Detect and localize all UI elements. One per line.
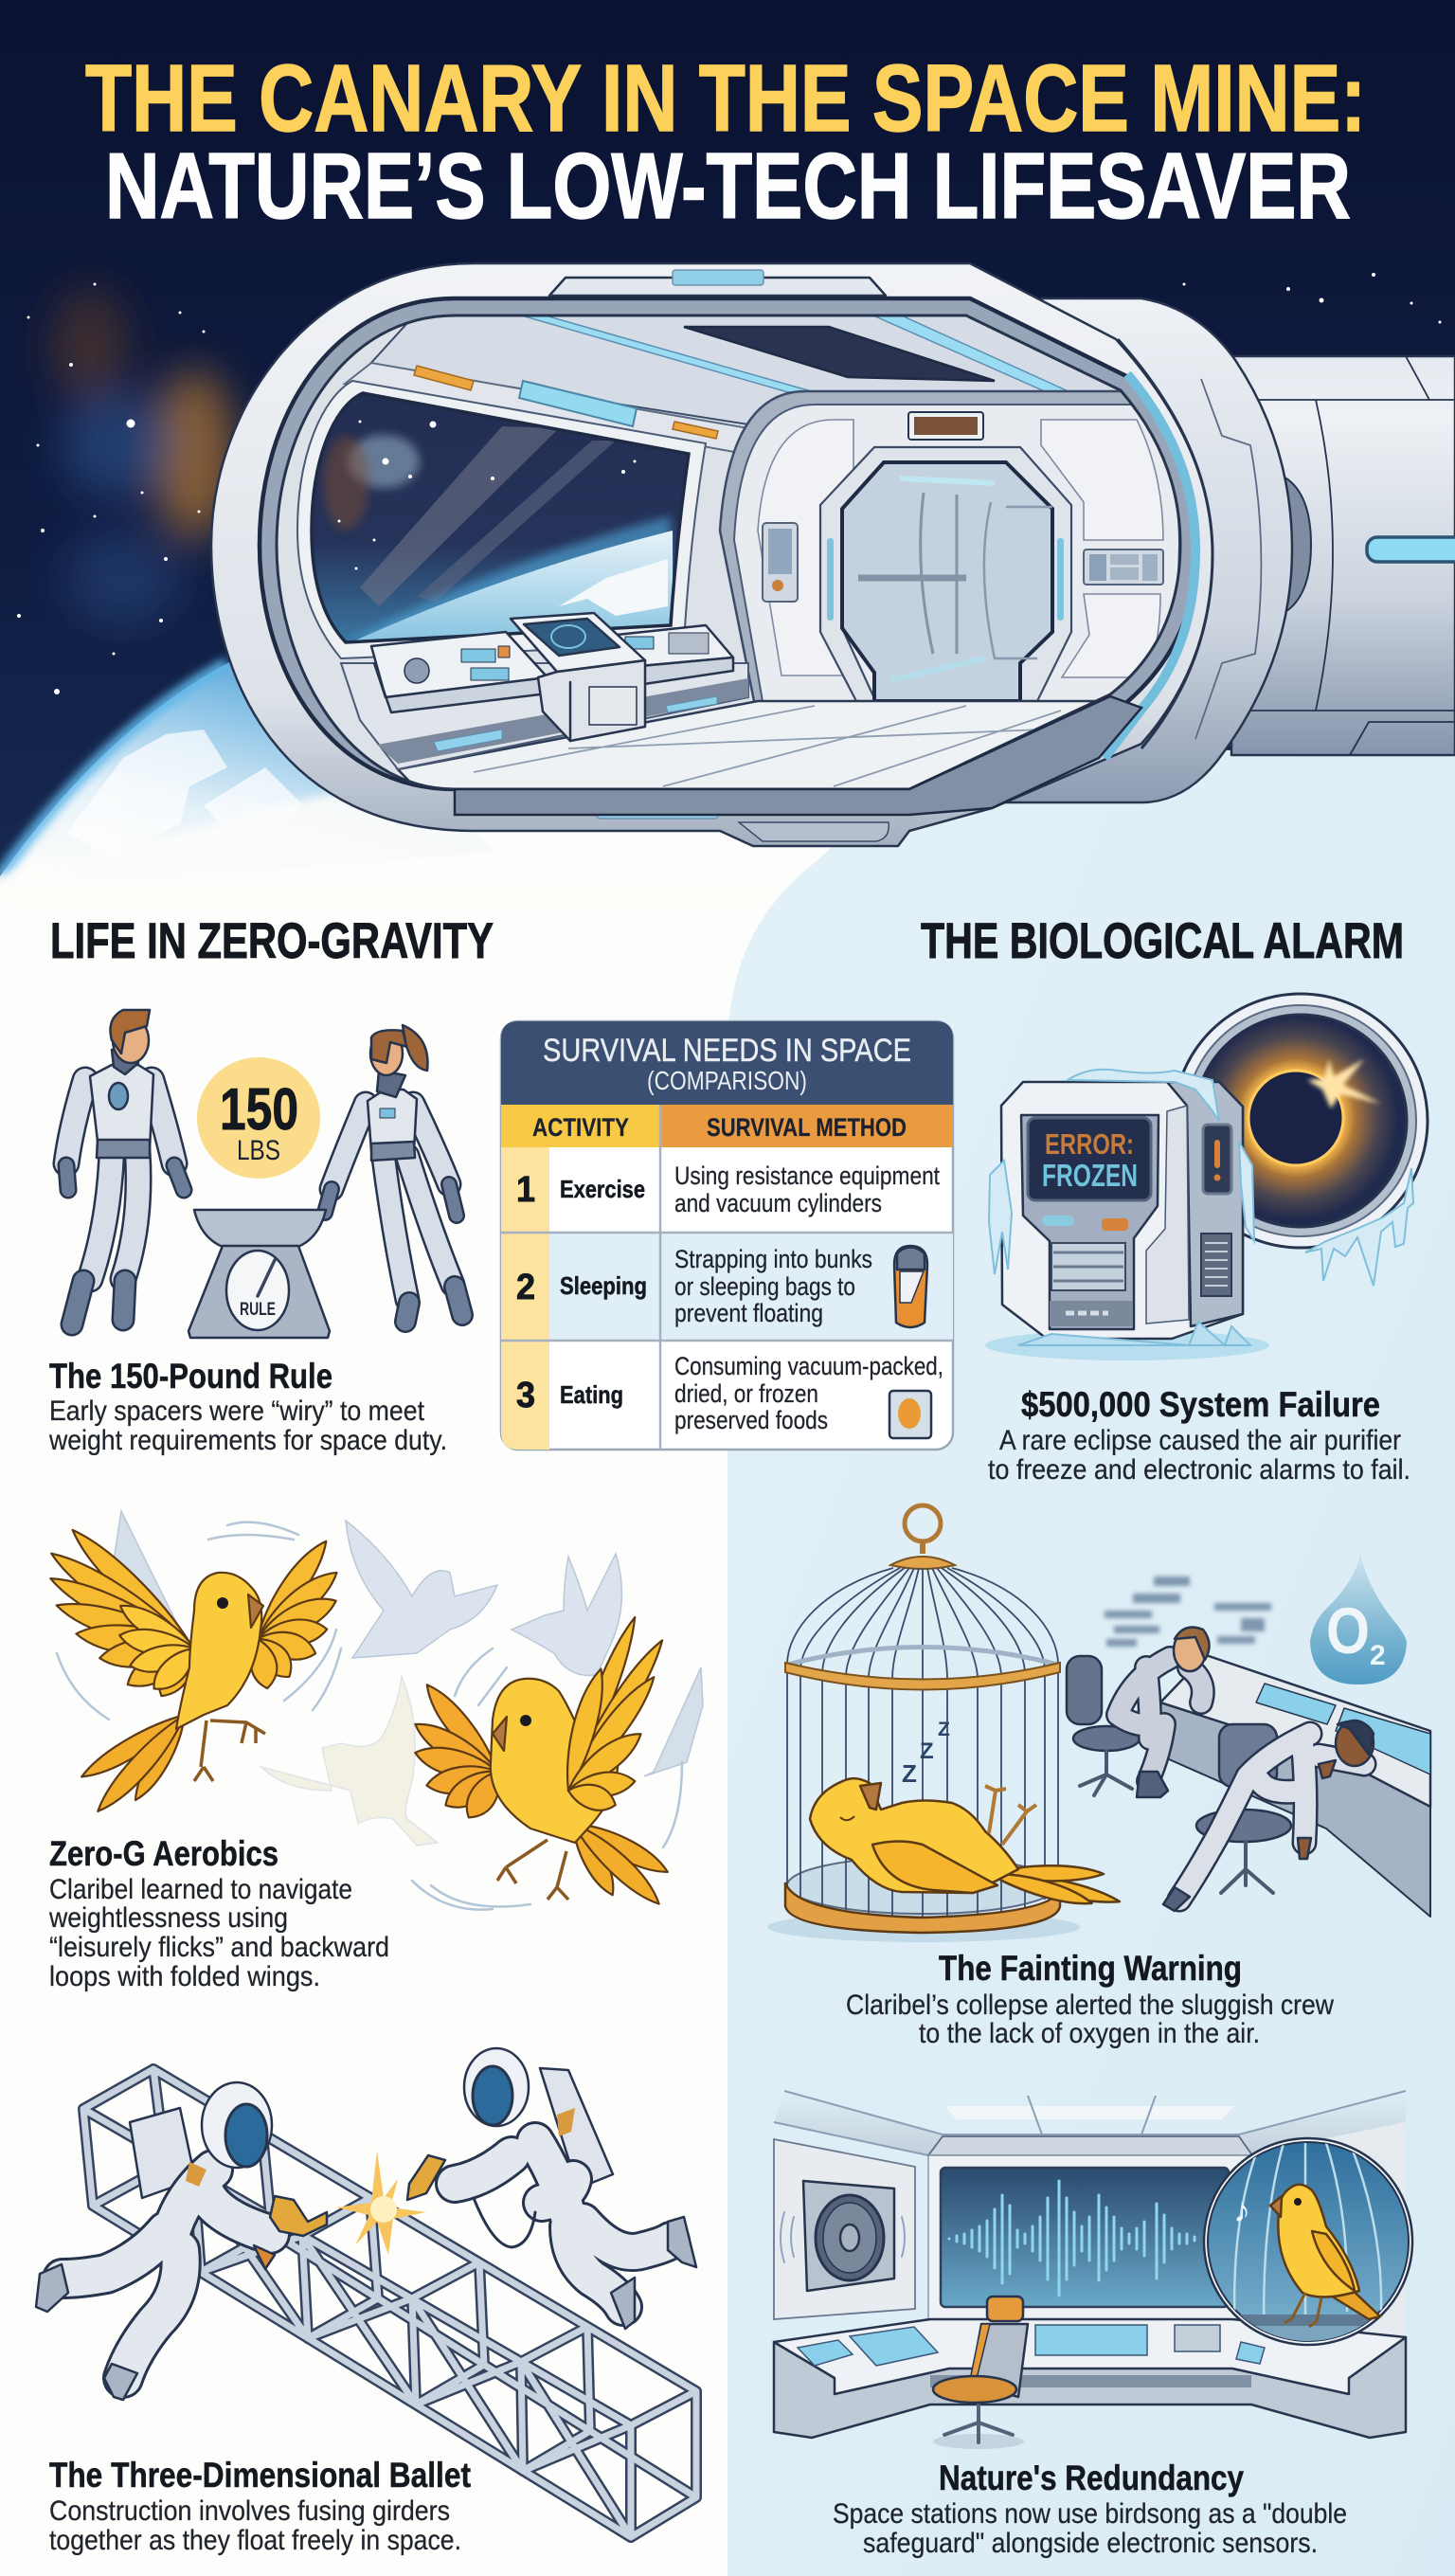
nebula glow xyxy=(52,289,234,625)
table body xyxy=(501,1021,953,1450)
heading: $500,000 System Failure xyxy=(1021,1385,1380,1424)
text block: the 150-pound rule xyxy=(48,1357,447,1456)
right bevel xyxy=(1146,1106,1189,1324)
beak xyxy=(860,1783,881,1810)
body xyxy=(810,1778,1018,1893)
collar ring xyxy=(947,298,1292,802)
cage floor disc xyxy=(787,1857,1058,1914)
astronaut 1 xyxy=(36,2082,327,2400)
console screens xyxy=(798,2325,1265,2366)
body: Space stations now use birdsong as a "double xyxy=(833,2498,1347,2530)
cage ring xyxy=(890,1505,955,1569)
title xyxy=(85,45,1366,238)
floor lines xyxy=(474,706,1061,786)
boot and head xyxy=(1137,1628,1210,1797)
space module illustration xyxy=(211,263,1455,846)
heading: Nature's Redundancy xyxy=(939,2459,1244,2497)
left door panel xyxy=(763,523,834,621)
console base shadow band xyxy=(930,2375,1251,2387)
ceiling skylight xyxy=(684,327,995,381)
column headers xyxy=(501,1105,953,1147)
cage base xyxy=(785,1882,1060,1933)
wall panel with lights xyxy=(345,363,748,453)
console top xyxy=(774,2319,1406,2394)
zzz xyxy=(902,1719,950,1788)
torso and head xyxy=(368,1025,427,1161)
collar bump xyxy=(1284,477,1311,613)
legs xyxy=(497,1840,568,1900)
male astronaut xyxy=(66,1010,184,1324)
cage bars back and dome xyxy=(787,1568,1058,1923)
crew member 2 xyxy=(1163,1720,1374,1911)
female astronaut xyxy=(325,1025,462,1322)
row 2: prevent floating xyxy=(674,1299,823,1327)
welding tool xyxy=(254,2196,327,2269)
cage bars in porthole xyxy=(1203,2143,1421,2350)
main shell xyxy=(211,263,1212,846)
back wall frame xyxy=(718,390,1129,701)
left wing xyxy=(45,1522,204,1703)
back wall panels xyxy=(758,420,1163,677)
lower hero fade to page xyxy=(0,791,834,900)
main screen xyxy=(941,2168,1229,2307)
interior outline xyxy=(277,315,1180,789)
suit limbs xyxy=(63,2170,270,2378)
connecting tube xyxy=(1231,356,1455,755)
ring edge line xyxy=(1118,339,1212,748)
boots and gloves xyxy=(66,1165,184,1324)
blue ring strip xyxy=(1105,374,1195,758)
text block: $500,000 system failure xyxy=(988,1385,1410,1486)
row 1: and vacuum cylinders xyxy=(674,1189,882,1217)
moon xyxy=(1248,1071,1343,1165)
boots and gloves xyxy=(325,1184,462,1322)
interior xyxy=(270,308,1203,791)
top hatch light xyxy=(549,270,886,296)
comparison table xyxy=(501,1021,953,1450)
tail feathers xyxy=(77,1707,193,1819)
zzz: Z xyxy=(938,1719,950,1740)
canary porthole xyxy=(1203,2138,1421,2350)
door opening xyxy=(842,462,1052,701)
console base xyxy=(774,2337,1406,2438)
back wall xyxy=(928,2155,1250,2321)
ceiling xyxy=(774,2091,1406,2155)
left wall xyxy=(278,326,753,779)
zzz: Z xyxy=(902,1759,917,1788)
hero: space backdrop xyxy=(0,0,1455,900)
illustration: fainted canary in cage xyxy=(767,1505,1430,1942)
column headers: SURVIVAL METHOD xyxy=(707,1113,907,1142)
cage mid ring xyxy=(785,1647,1060,1690)
floor lip xyxy=(455,696,1141,815)
table header xyxy=(501,1021,953,1105)
illustration: truss and astronauts xyxy=(36,2048,696,2537)
beak xyxy=(493,1717,507,1751)
150 lbs badge xyxy=(197,1057,320,1179)
front panel xyxy=(1021,1115,1159,1329)
text block: the fainting warning: to the lack of oxygen in the air. xyxy=(919,2018,1260,2049)
row 2: 2 xyxy=(516,1268,535,1307)
row 2 xyxy=(516,1245,872,1327)
console desk xyxy=(1160,1655,1430,1917)
text block: nature's redundancy: safeguard" alongside electronic sensors. xyxy=(863,2528,1318,2559)
row 3: dried, or frozen xyxy=(674,1379,818,1408)
backpack xyxy=(540,2068,613,2189)
heading: The Three-Dimensional Ballet xyxy=(49,2456,471,2495)
illustration: control room with canary xyxy=(774,2091,1421,2449)
side vent xyxy=(1201,1234,1231,1296)
body xyxy=(176,1573,261,1729)
right wing xyxy=(557,1613,671,1815)
body: Construction involves fusing girders xyxy=(49,2495,450,2527)
body: Claribel learned to navigate xyxy=(49,1874,352,1905)
scale xyxy=(189,1210,330,1338)
text block: three-dimensional ballet: together as they float freely in space. xyxy=(49,2525,461,2556)
table header: (COMPARISON) xyxy=(647,1066,807,1095)
row 1: Using resistance equipment xyxy=(674,1162,940,1190)
right wall xyxy=(1250,2122,1406,2340)
text block: zero-g aerobics: loops with folded wings. xyxy=(49,1961,320,1992)
body xyxy=(491,1679,618,1843)
oxygen drop xyxy=(1310,1554,1407,1684)
row 3: Eating xyxy=(560,1380,623,1409)
stars xyxy=(17,273,1442,694)
window outline xyxy=(312,393,689,642)
icon: food packet xyxy=(889,1391,931,1438)
heading: The Fainting Warning xyxy=(939,1949,1242,1988)
window frame xyxy=(297,381,706,658)
upturned feet xyxy=(985,1786,1036,1845)
speaker xyxy=(781,2181,905,2291)
canary 2 xyxy=(409,1613,673,1911)
suit limbs xyxy=(332,1104,453,1300)
ceiling panel xyxy=(928,2136,1252,2155)
illustration: astronauts and scale xyxy=(66,1010,462,1338)
illustration: frozen air purifier xyxy=(985,1070,1269,1360)
fainted canary xyxy=(810,1778,1122,1910)
ghost doves xyxy=(112,1511,703,1776)
sign xyxy=(908,412,983,440)
chair 2 xyxy=(1196,1724,1291,1893)
body: Claribel’s collepse alerted the sluggish crew xyxy=(846,1990,1334,2021)
grey ring band xyxy=(260,298,1197,789)
screen: FROZEN xyxy=(1042,1158,1138,1193)
chair xyxy=(933,2297,1028,2449)
ceiling lines xyxy=(774,2091,1406,2155)
number column xyxy=(501,1147,549,1450)
window view xyxy=(313,394,687,640)
tail feathers xyxy=(565,1814,673,1911)
welding tool xyxy=(407,2155,535,2247)
pale dove xyxy=(261,1677,438,1846)
tube window strip xyxy=(1367,537,1455,562)
row 2: or sleeping bags to xyxy=(674,1272,855,1301)
sun flare xyxy=(1307,1059,1381,1108)
boots xyxy=(611,2217,696,2329)
left wall xyxy=(774,2139,915,2319)
tail feathers xyxy=(988,1865,1122,1910)
row 1 xyxy=(516,1162,940,1217)
atmosphere glow xyxy=(0,663,227,876)
motion lines xyxy=(57,1522,682,1910)
center terminal xyxy=(511,613,645,741)
closed eye xyxy=(840,1816,854,1820)
right panel background xyxy=(728,748,1455,2576)
text block: three-dimensional ballet xyxy=(49,2456,471,2556)
wing xyxy=(872,1842,997,1893)
music note: ♪ xyxy=(1233,2190,1250,2229)
eye xyxy=(520,1715,531,1726)
150 lbs badge: LBS xyxy=(237,1135,280,1166)
uniform xyxy=(1118,1658,1203,1781)
helmet xyxy=(464,2048,529,2126)
text block: the fainting warning xyxy=(846,1949,1334,2049)
ice xyxy=(989,1070,1254,1345)
door outer frame xyxy=(820,447,1071,701)
crew member 1 xyxy=(1118,1628,1210,1797)
eye xyxy=(217,1597,228,1609)
screen: ERROR: xyxy=(1045,1127,1134,1161)
boots and fittings xyxy=(36,2264,137,2400)
astronaut 2 xyxy=(407,2048,696,2329)
machine body xyxy=(1001,1082,1243,1339)
row 1: Exercise xyxy=(560,1175,645,1203)
text block: zero-g aerobics: “leisurely flicks” and backward xyxy=(49,1932,389,1963)
patch xyxy=(186,2162,207,2187)
puddle xyxy=(985,1330,1269,1360)
row 2 tint xyxy=(549,1233,953,1341)
oxygen drop: 2 xyxy=(1370,1640,1386,1671)
text block: nature's redundancy xyxy=(833,2459,1347,2559)
row 3: preserved foods xyxy=(674,1406,828,1434)
lower left wall strip xyxy=(341,663,748,769)
left wing xyxy=(409,1679,509,1825)
floor skirt band xyxy=(377,678,748,764)
ceiling light strips xyxy=(512,313,1070,392)
suit limbs xyxy=(455,2141,671,2307)
150 lbs badge: 150 xyxy=(220,1077,298,1143)
table header: SURVIVAL NEEDS IN SPACE xyxy=(543,1033,911,1069)
wall lights low xyxy=(434,696,717,751)
chair 1 xyxy=(1067,1656,1140,1795)
torso and head xyxy=(90,1010,153,1158)
body: A rare eclipse caused the air purifier xyxy=(999,1425,1401,1456)
controls xyxy=(1042,1216,1128,1231)
suit limbs xyxy=(66,1080,174,1279)
screen xyxy=(1028,1118,1151,1200)
uniform xyxy=(1179,1734,1364,1900)
backpack xyxy=(130,2108,195,2198)
blurred vision text xyxy=(1105,1576,1271,1647)
vent grille xyxy=(1050,1243,1133,1326)
text block: zero-g aerobics xyxy=(48,1834,389,1992)
right door panel xyxy=(1057,538,1163,621)
ceiling light xyxy=(944,2106,1234,2119)
icon: sleeping bag xyxy=(894,1246,927,1327)
audio waveform xyxy=(949,2181,1195,2296)
beak xyxy=(248,1594,263,1628)
row 2: Strapping into bunks xyxy=(674,1245,872,1273)
truss xyxy=(83,2069,696,2537)
back wall xyxy=(734,405,1179,701)
scale: RULE xyxy=(240,1300,276,1320)
row 1: 1 xyxy=(516,1170,535,1210)
earth limb xyxy=(0,625,493,891)
side panel xyxy=(1167,1082,1243,1326)
text block: zero-g aerobics: weightlessness using xyxy=(48,1902,288,1934)
heading: Zero-G Aerobics xyxy=(49,1834,278,1873)
welding sparks xyxy=(336,2151,426,2255)
corridor xyxy=(858,478,1052,680)
legs xyxy=(194,1720,265,1781)
eclipse sky xyxy=(1195,1015,1407,1227)
helmet xyxy=(202,2082,272,2168)
right wing xyxy=(246,1535,344,1690)
row 3: Consuming vacuum-packed, xyxy=(674,1352,943,1380)
text block: the 150-pound rule: weight requirements for space duty. xyxy=(48,1425,447,1456)
heading: The 150-Pound Rule xyxy=(49,1357,332,1396)
collar panel lines xyxy=(1195,379,1261,739)
ceiling xyxy=(369,313,1156,424)
oxygen drop: O xyxy=(1326,1594,1370,1667)
body: Early spacers were “wiry” to meet xyxy=(49,1396,425,1427)
row 3 xyxy=(516,1352,943,1434)
row lines xyxy=(501,1105,953,1450)
text block: $500,000 system failure: to freeze and electronic alarms to fail. xyxy=(988,1454,1410,1486)
clouds xyxy=(66,730,303,857)
left wing coverts xyxy=(115,1597,204,1698)
singing canary xyxy=(1270,2185,1380,2327)
illustration: flying canaries xyxy=(45,1511,703,1911)
section heading: life in zero-gravity: LIFE IN ZERO-GRAVITY xyxy=(50,913,494,969)
canary 1 xyxy=(45,1522,344,1819)
zzz: Z xyxy=(920,1738,934,1764)
left console xyxy=(371,632,548,712)
floor xyxy=(398,701,1160,789)
cage base shadow xyxy=(767,1912,1080,1942)
icicles on porthole xyxy=(1305,1168,1413,1286)
boot, hands, head xyxy=(1163,1720,1374,1911)
warning indicator xyxy=(1203,1125,1231,1194)
column headers: ACTIVITY xyxy=(532,1113,629,1142)
right console xyxy=(617,625,733,684)
patch xyxy=(557,2108,575,2136)
illustration: eclipse porthole xyxy=(1174,994,1428,1286)
bottom hatch light xyxy=(597,803,889,841)
row 3: 3 xyxy=(516,1376,535,1415)
row 2: Sleeping xyxy=(560,1271,647,1300)
